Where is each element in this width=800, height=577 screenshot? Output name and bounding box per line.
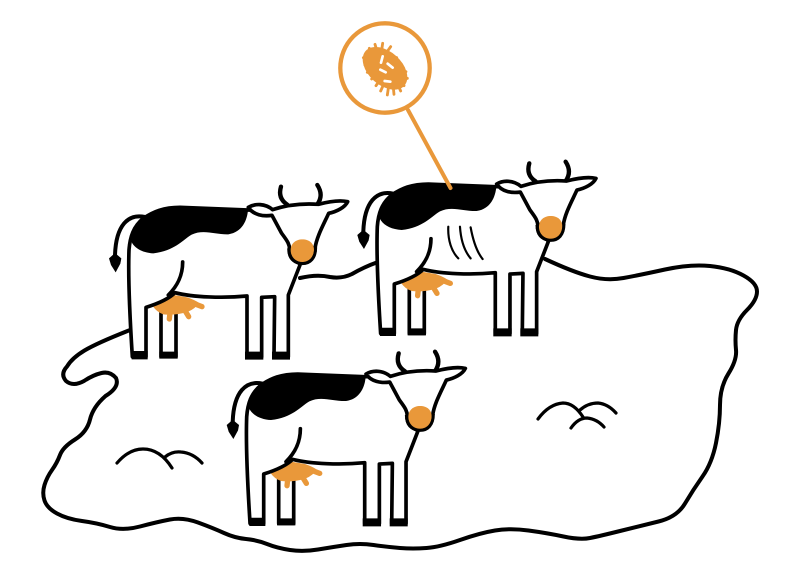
muzzle bbox=[406, 406, 433, 430]
hip line bbox=[417, 239, 431, 272]
hooves bbox=[248, 518, 408, 526]
black patch bbox=[131, 206, 248, 253]
muzzle bbox=[289, 239, 316, 264]
horns bbox=[528, 162, 569, 181]
cow: upper left bbox=[109, 185, 348, 360]
body and legs bbox=[129, 207, 300, 357]
head bbox=[497, 178, 596, 240]
tail bbox=[109, 216, 145, 272]
far hind leg bbox=[409, 287, 424, 333]
tail bbox=[227, 383, 263, 439]
bacterium cilia bbox=[363, 43, 407, 95]
udder bbox=[153, 295, 202, 319]
udder bbox=[270, 461, 320, 486]
pasture outline bbox=[43, 259, 757, 551]
black patch bbox=[379, 183, 496, 230]
far hind leg bbox=[161, 310, 176, 357]
horns bbox=[398, 352, 438, 371]
hooves bbox=[131, 351, 290, 360]
icon: bacterium bbox=[355, 39, 415, 98]
hip line bbox=[168, 262, 183, 295]
horns bbox=[280, 185, 321, 205]
ribs bbox=[448, 227, 483, 259]
far hind leg bbox=[279, 477, 294, 523]
bacterium body bbox=[355, 39, 415, 98]
muzzle bbox=[537, 216, 564, 240]
black patch bbox=[248, 373, 366, 420]
hooves bbox=[379, 328, 538, 336]
head bbox=[248, 201, 348, 263]
callout ring bbox=[340, 23, 430, 113]
tail bbox=[357, 193, 393, 249]
cow: upper right, infected and thin bbox=[357, 162, 596, 336]
head bbox=[366, 368, 465, 430]
udder bbox=[401, 271, 450, 296]
body and legs bbox=[377, 184, 548, 333]
hip line bbox=[286, 429, 300, 462]
grass tuft right bbox=[538, 403, 616, 428]
callout: bacterium in a magnifier bbox=[340, 23, 450, 188]
grass tuft left bbox=[117, 449, 202, 468]
body and legs bbox=[246, 374, 418, 523]
cow: lower centre bbox=[227, 352, 465, 526]
callout pointer line bbox=[408, 110, 450, 188]
bacterium inclusions bbox=[380, 56, 393, 82]
